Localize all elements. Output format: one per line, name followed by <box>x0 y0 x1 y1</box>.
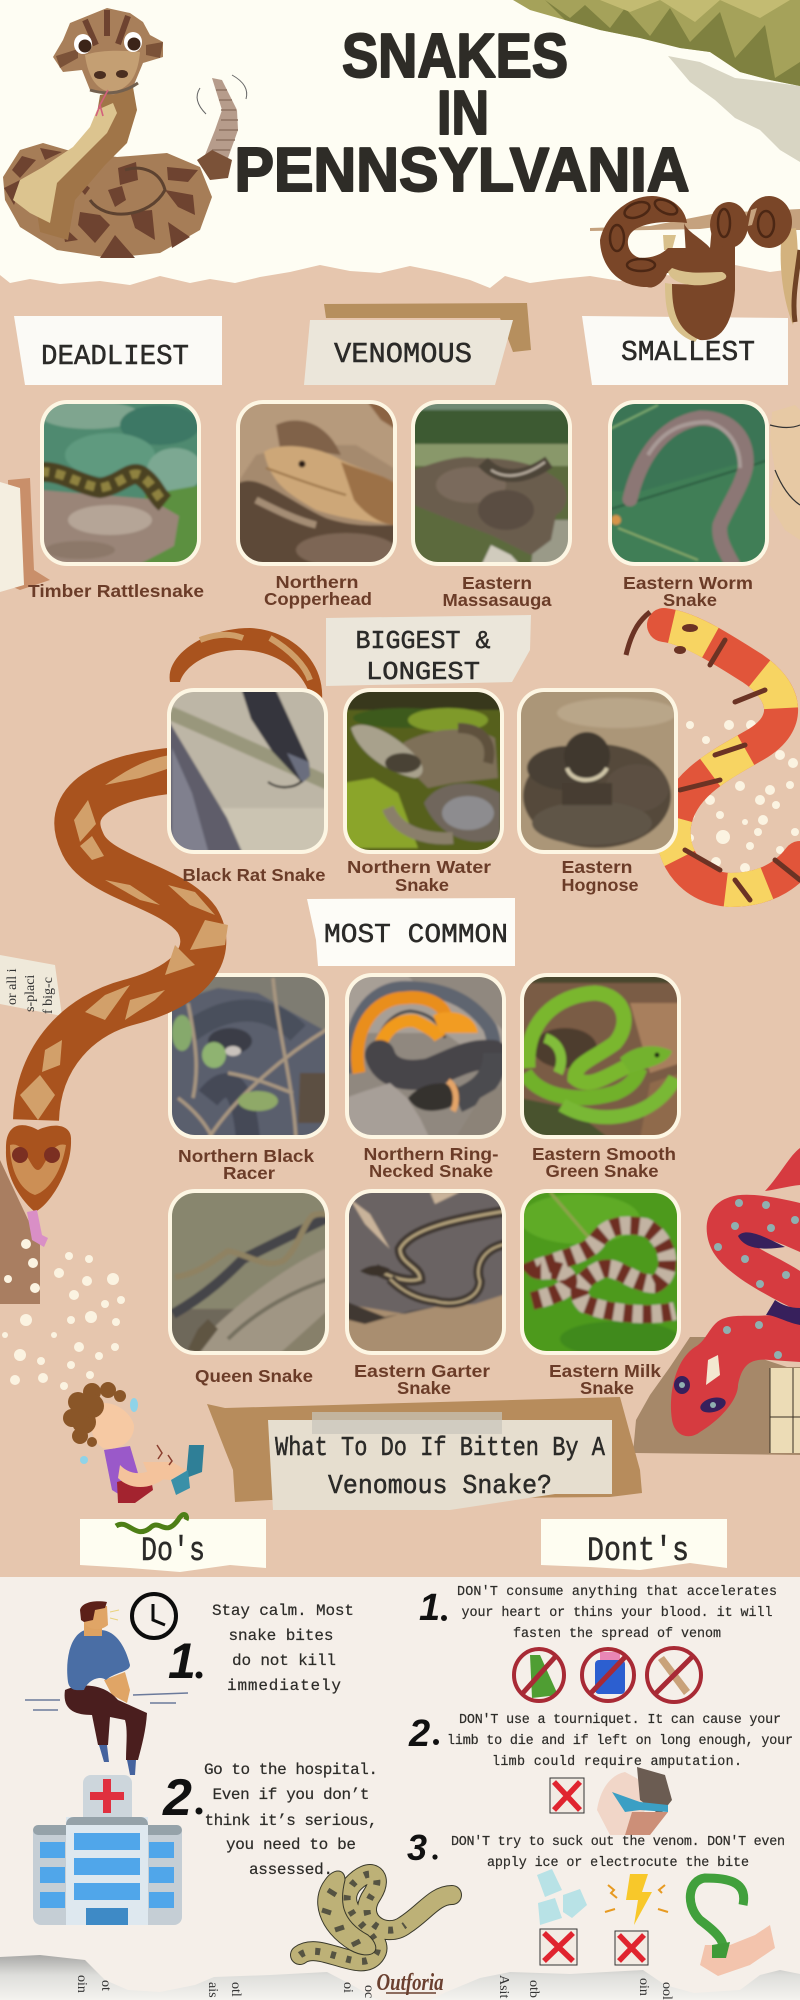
torn cream header paper <box>0 0 800 288</box>
torn newspaper strip, bottom: ool <box>659 1982 674 2000</box>
row 2 to 4 labels: Northern Water <box>347 857 491 877</box>
heading: most common <box>307 898 515 966</box>
heading banner: what to do if bitten <box>207 1397 642 1510</box>
icon: small green snake <box>116 1515 187 1532</box>
heading paper: smallest <box>582 316 788 385</box>
torn newspaper strip, bottom: otl <box>228 1982 243 1997</box>
title: IN <box>437 79 489 148</box>
cream dots behind coral snake <box>685 720 799 873</box>
torn newspaper strip, bottom: oi <box>340 1982 355 1993</box>
row 1 labels: Massasauga <box>442 590 552 610</box>
do step 2: Go to the hospital. <box>204 1761 378 1779</box>
dont step 2: 2 <box>408 1713 430 1755</box>
row 1 labels: Copperhead <box>264 589 372 609</box>
photo: northern water snake <box>343 688 504 854</box>
row 2 to 4 labels: Snake <box>397 1378 451 1398</box>
photo: northern black racer <box>168 973 329 1139</box>
torn newspaper strip, bottom: ot <box>98 1980 113 1991</box>
tab: dont's <box>541 1519 727 1571</box>
photo: northern copperhead <box>236 400 397 567</box>
row 2 to 4 labels: Northern Black <box>178 1146 314 1166</box>
photo: eastern milk snake <box>520 1189 681 1357</box>
dont step 3 <box>407 1827 785 1871</box>
dont step 1 <box>419 1585 777 1642</box>
photo: northern ring-necked snake <box>345 973 506 1139</box>
heading: biggest and longest: LONGEST <box>366 657 480 687</box>
icon: clock <box>132 1594 176 1638</box>
dont step 2: limb to die and if left on long enough, your <box>447 1734 793 1749</box>
row 2 to 4 labels: Snake <box>395 875 449 895</box>
torn newspaper strip, bottom: oin <box>74 1975 89 1993</box>
torn newspaper strip, bottom: Asit <box>496 1975 511 1998</box>
torn newspaper strip, bottom: oc <box>361 1985 376 1998</box>
row 2 to 4 labels: Snake <box>580 1378 634 1398</box>
cream dots, lower left <box>2 1239 125 1390</box>
title: SNAKES <box>342 22 568 91</box>
heading banner: what to do if bitten: What To Do If Bitten By A <box>275 1434 606 1464</box>
do step 1: Stay calm. Most <box>212 1602 354 1620</box>
do step 2: think it’s serious, <box>204 1812 378 1830</box>
do step 1: 1 <box>168 1633 196 1689</box>
hanging brown snake on branch <box>590 196 800 342</box>
do step 1: immediately <box>227 1677 341 1695</box>
icon: ice cubes <box>537 1869 587 1925</box>
heading: biggest and longest: BIGGEST & <box>356 626 491 656</box>
illustration: hospital <box>33 1775 182 1925</box>
dont step 1: 1 <box>419 1587 440 1629</box>
newspaper scrap: f big-c <box>41 977 56 1014</box>
row 1 labels: Eastern Worm <box>623 573 753 593</box>
photo: eastern massasauga <box>411 400 572 566</box>
photo: black rat snake <box>167 688 328 854</box>
torn olive camouflage paper, top right <box>513 0 800 86</box>
dont step 3: 3 <box>407 1827 427 1868</box>
panel: action steps <box>0 1577 800 2000</box>
row 2 to 4 labels: Northern Ring- <box>364 1144 499 1164</box>
photo: eastern garter snake <box>345 1189 506 1355</box>
icon: lightning bolt <box>605 1874 668 1925</box>
torn newspaper strip, bottom: oin <box>636 1978 651 1996</box>
row 2 to 4 labels: Necked Snake <box>369 1161 493 1181</box>
dont step 1: fasten the spread of venom <box>513 1627 721 1642</box>
do step 1 <box>168 1602 354 1695</box>
tab: dont's: Dont's <box>587 1533 689 1571</box>
title <box>234 22 690 205</box>
left and right collage scraps <box>0 405 800 592</box>
brown paper scrap, left <box>0 1160 40 1304</box>
dont step 1: your heart or thins your blood. it will <box>462 1606 772 1621</box>
dont step 2: DON'T use a tourniquet. It can cause your <box>459 1713 781 1728</box>
cardboard and grid paper, lower right <box>633 1337 800 1455</box>
photo: timber rattlesnake <box>40 400 203 566</box>
row 1 labels: Snake <box>663 590 717 610</box>
heading paper: deadliest: DEADLIEST <box>41 340 189 373</box>
newspaper scrap <box>0 955 62 1016</box>
row 1 labels: Northern <box>276 572 358 592</box>
do step 2: Even if you don’t <box>212 1786 370 1804</box>
do step 1: do not kill <box>232 1652 336 1670</box>
illustration: red snake, lower right <box>671 1148 800 1436</box>
torn grey paper, top right <box>668 56 800 162</box>
photo: eastern hognose <box>517 688 678 854</box>
heading: venomous <box>304 303 531 385</box>
photo: eastern worm snake <box>608 400 769 566</box>
big brown snake, left <box>6 628 322 1247</box>
newspaper scrap: or all i <box>5 968 20 1005</box>
photo: eastern smooth green snake <box>520 973 681 1139</box>
illustration: tourniquet on arm <box>597 1767 672 1835</box>
photo: queen snake <box>168 1189 329 1355</box>
tab: do's: Do's <box>141 1533 205 1571</box>
icon: no smoking <box>647 1648 701 1702</box>
do step 2: you need to be <box>226 1836 356 1854</box>
illustration: man sitting holding leg <box>25 1601 188 1775</box>
row 2 to 4 labels: Eastern Milk <box>549 1361 661 1381</box>
do step 2: assessed. <box>249 1861 333 1879</box>
torn newspaper strip, bottom <box>0 1955 800 2000</box>
row 2 to 4 labels: Green Snake <box>546 1161 659 1181</box>
do step 2 <box>162 1761 378 1879</box>
heading paper: deadliest <box>14 316 222 385</box>
row 2 to 4 labels: Queen Snake <box>195 1366 313 1386</box>
tab: do's <box>80 1519 266 1572</box>
heading: biggest and longest <box>326 615 531 687</box>
dont step 2: limb could require amputation. <box>492 1755 742 1770</box>
row 2 to 4 labels: Hognose <box>562 875 639 895</box>
icon: no alcohol <box>514 1649 564 1701</box>
row 2 to 4 labels <box>178 857 676 1398</box>
dont step 2 <box>408 1713 793 1770</box>
row 1 labels: Timber Rattlesnake <box>28 581 204 601</box>
x boxes <box>540 1929 648 1965</box>
dont step 3: DON'T try to suck out the venom. DON'T even <box>451 1835 785 1850</box>
heading: most common: MOST COMMON <box>324 921 508 951</box>
row 1 labels: Eastern <box>462 573 532 593</box>
do step 1: snake bites <box>228 1627 334 1645</box>
icon: x box <box>550 1778 584 1813</box>
icon: no pills <box>582 1649 634 1701</box>
torn newspaper strip, bottom: otb <box>526 1980 541 1998</box>
title: PENNSYLVANIA <box>234 136 690 205</box>
row 1 labels <box>28 572 753 610</box>
row 2 to 4 labels: Eastern <box>562 857 632 877</box>
do step 2: 2 <box>162 1769 192 1827</box>
row 2 to 4 labels: Eastern Smooth <box>532 1144 676 1164</box>
dont step 1: DON'T consume anything that accelerates <box>457 1585 777 1600</box>
heading: venomous: VENOMOUS <box>334 338 472 371</box>
illustration: hurt boy <box>63 1382 204 1503</box>
row 2 to 4 labels: Black Rat Snake <box>182 865 326 885</box>
logo: Outforia: Outforia <box>376 1970 444 1996</box>
newspaper scrap: s-placi <box>23 975 38 1012</box>
heading text: smallest: SMALLEST <box>621 336 755 369</box>
illustration: coral snake, right <box>626 612 800 900</box>
row 2 to 4 labels: Racer <box>223 1163 275 1183</box>
illustration: green snake biting hand <box>690 1878 775 1976</box>
illustration: rattlesnake <box>3 8 247 258</box>
dont step 3: apply ice or electrocute the bite <box>487 1856 749 1871</box>
heading banner: what to do if bitten: Venomous Snake? <box>328 1472 552 1502</box>
illustration: spotted yellow snake <box>300 1871 452 1961</box>
row 2 to 4 labels: Eastern Garter <box>354 1361 490 1381</box>
torn newspaper strip, bottom: ais <box>205 1982 220 1998</box>
